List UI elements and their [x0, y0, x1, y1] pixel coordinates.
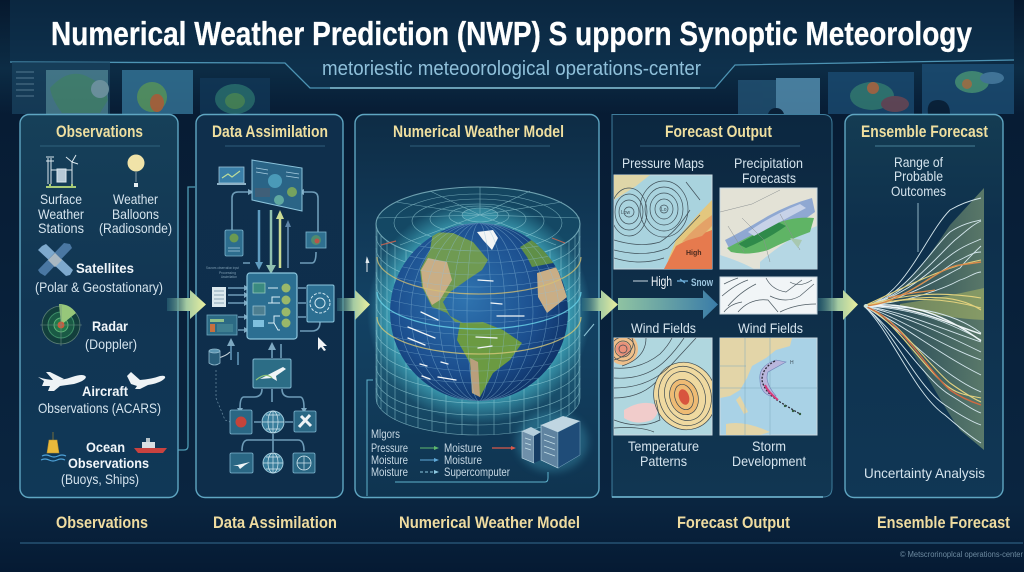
legend: Supercomputer [444, 467, 510, 479]
icon: globe card right [306, 232, 326, 248]
continent: north america [420, 232, 488, 323]
supercomputer [516, 412, 588, 472]
text: satellites: (Polar & Geostationary) [35, 279, 163, 295]
heading: data assimilation: Data Assimilation [212, 122, 328, 141]
icon: tablet radar [307, 285, 334, 322]
panel: forecast output [608, 114, 832, 497]
text: weather balloons: Balloons [112, 206, 159, 222]
bottom labels: Data Assimilation [213, 513, 337, 532]
legend: high and snow: Snow [691, 277, 713, 289]
label: range of probable outcomes: Range of [894, 154, 943, 170]
connector: observations to data assimilation [178, 187, 195, 450]
map: stream lines [720, 277, 817, 314]
icon: aircraft left [38, 372, 86, 391]
text: aircraft: Aircraft [82, 383, 128, 399]
label: range of probable outcomes: Outcomes [891, 183, 946, 199]
label: temperature patterns [628, 438, 699, 469]
continent: europe and africa [520, 240, 553, 267]
arrow: internal forecast arrow [618, 290, 718, 319]
label: storm development: Storm [752, 438, 786, 454]
map: pressure: Lo [661, 207, 667, 213]
bottom labels: Observations [56, 513, 148, 532]
ensemble spread chart [864, 188, 984, 450]
legend: Moisture [444, 443, 482, 455]
icon: aircraft data box [253, 359, 291, 388]
panel: numerical weather model [355, 114, 599, 498]
text: radar [85, 318, 137, 352]
subtitle: metoriestic meteoorological operations-center [322, 58, 701, 80]
label: storm development: Development [732, 453, 806, 469]
legend [371, 429, 516, 479]
map: pressure: High [686, 250, 702, 257]
icon: buoy [41, 432, 66, 461]
legend: Mlgors [371, 429, 400, 441]
text: surface weather stations: Stations [38, 220, 84, 236]
label: temperature patterns: Temperature [628, 438, 699, 454]
legend: Moisture [371, 455, 408, 467]
cylinder grid rings [377, 238, 581, 354]
icon: aircraft right [127, 372, 165, 389]
arrow: forecast to ensemble [818, 290, 858, 320]
legend: high and snow [633, 273, 713, 289]
text: aircraft [38, 383, 161, 416]
icon: surface weather station [46, 155, 78, 187]
globe [390, 223, 568, 401]
legend: high and snow: High [651, 273, 672, 289]
bottom labels: Forecast Output [677, 513, 790, 532]
icon: satellite [38, 243, 73, 276]
map: storm track [720, 338, 817, 435]
label: range of probable outcomes: Probable [894, 168, 943, 184]
text: weather balloons: (Radiosonde) [99, 220, 172, 236]
map: precipitation [720, 188, 817, 269]
label: precipitation forecasts: Precipitation [734, 155, 803, 171]
text: weather balloons [99, 191, 172, 236]
bottom labels: Numerical Weather Model [399, 513, 580, 532]
wind arrows [408, 280, 524, 380]
text: ocean observations [61, 439, 149, 487]
icon: dashboard screen [252, 160, 302, 211]
label: wind fields right: Wind Fields [738, 320, 803, 336]
arrow: model to forecast [582, 290, 618, 320]
text: surface weather stations [38, 191, 84, 236]
monitors: right wall [738, 64, 1014, 114]
icon: document [212, 287, 226, 307]
icon: node row one [230, 410, 316, 434]
arrow: observations to data assimilation [167, 290, 206, 319]
text: satellites [35, 260, 163, 295]
flow arrows [218, 192, 320, 452]
continent: greenland [477, 230, 498, 250]
label: precipitation forecasts [734, 155, 803, 186]
text: aircraft: Observations (ACARS) [38, 400, 161, 416]
tiny notes: Assimilation [221, 275, 237, 279]
heading: ensemble forecast: Ensemble Forecast [861, 122, 988, 141]
legend: Moisture [371, 467, 408, 479]
icon: weather balloon [128, 154, 144, 187]
icon: sensor card left [225, 230, 243, 256]
icon: data table [207, 315, 237, 335]
header plate [10, 0, 1014, 88]
map: pressure [611, 175, 712, 269]
monitors: left wall [12, 62, 270, 114]
heading: forecast output: Forecast Output [665, 122, 772, 141]
small vertical arrows [366, 258, 594, 336]
icon: central analysis unit [247, 273, 297, 339]
panel: data assimilation [196, 114, 343, 498]
label: storm development [732, 438, 806, 469]
label: pressure maps: Pressure Maps [622, 155, 704, 171]
text: ocean observations: (Buoys, Ships) [61, 471, 139, 487]
text: surface weather stations: Weather [38, 206, 84, 222]
connector lines [367, 380, 548, 496]
label: wind fields left: Wind Fields [631, 320, 696, 336]
icon: ship [134, 438, 167, 453]
text: ocean observations: Ocean [86, 439, 125, 455]
icon: doppler radar [40, 304, 82, 346]
tiny notes: Processing [219, 271, 236, 275]
map: pressure: Low [621, 210, 631, 216]
panel: ensemble forecast [845, 114, 1003, 498]
label: range of probable outcomes [891, 154, 946, 252]
label: precipitation forecasts: Forecasts [742, 170, 796, 186]
icon: node row two [230, 453, 315, 473]
tiny notes [206, 266, 239, 279]
tiny notes: Sources observation input [206, 266, 239, 270]
text: radar: (Doppler) [85, 336, 137, 352]
text: satellites: Satellites [76, 260, 134, 276]
heading: observations: Observations [56, 122, 143, 141]
label: uncertainty analysis: Uncertainty Analysis [864, 465, 985, 481]
continent: south america [457, 322, 522, 397]
text: radar: Radar [92, 318, 128, 334]
map: storm track: H [790, 360, 794, 366]
arrow: data assimilation to model [337, 290, 370, 320]
text: surface weather stations: Surface [40, 191, 82, 207]
icon: cursor [318, 337, 327, 351]
legend: Pressure [371, 443, 408, 455]
legend: Moisture [444, 455, 482, 467]
heading: numerical weather model: Numerical Weather Model [393, 122, 564, 141]
map: temperature [614, 338, 712, 436]
icon: database cylinder [209, 349, 230, 422]
text: weather balloons: Weather [113, 191, 158, 207]
panel: observations [20, 114, 178, 498]
icon: laptop [217, 167, 246, 185]
text: ocean observations: Observations [68, 455, 149, 471]
cylinder grid background [367, 187, 591, 435]
label: temperature patterns: Patterns [640, 453, 687, 469]
bottom labels [56, 513, 1010, 532]
